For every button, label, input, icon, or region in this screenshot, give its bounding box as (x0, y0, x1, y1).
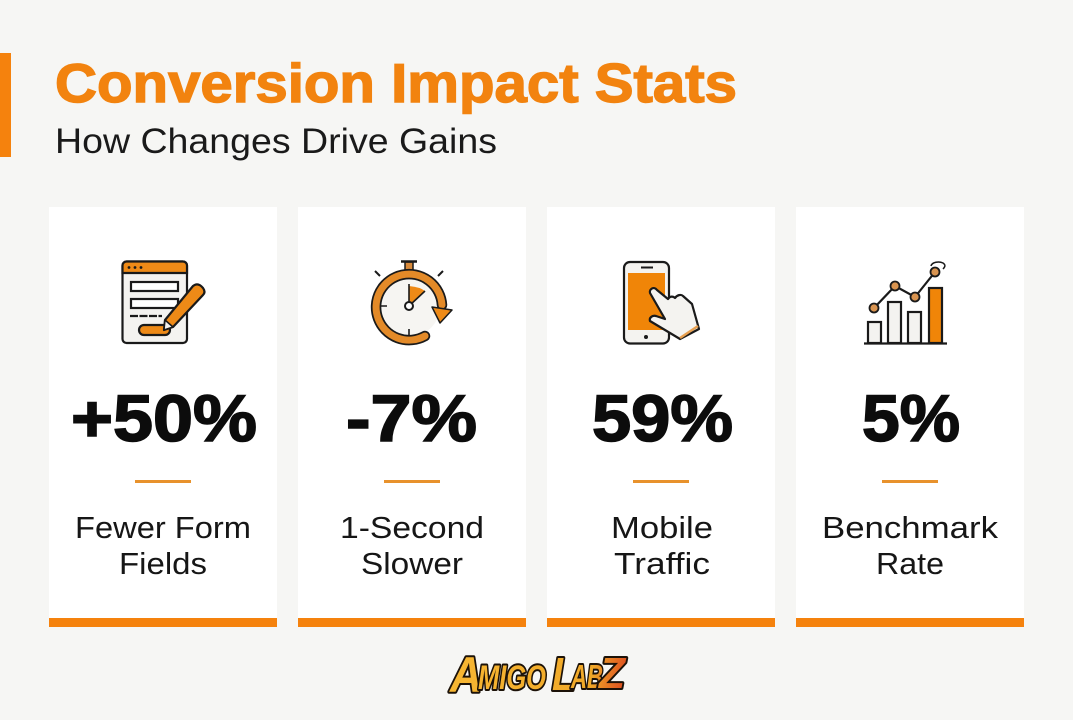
stat: 59%: 59% (592, 381, 733, 455)
label: benchmark rate: Benchmark (822, 510, 999, 545)
label: 1-second slower: Slower (361, 546, 463, 581)
icon: phone with tapping hand (624, 262, 699, 344)
logo: Amigo LabZ: MIGO (478, 659, 546, 697)
label: 1-second slower: 1-Second (340, 510, 484, 545)
logo: Amigo LabZ (448, 647, 627, 703)
label: fewer form fields: Fewer Form (75, 510, 251, 545)
title: Conversion Impact Stats (55, 52, 737, 114)
logo: Amigo LabZ: Z (597, 649, 627, 698)
stat: 5%: 5% (862, 381, 960, 455)
subtitle: How Changes Drive Gains (55, 122, 497, 161)
logo: Amigo LabZ: AB (570, 658, 603, 695)
label: benchmark rate: Rate (876, 546, 944, 581)
logo: Amigo LabZ: L (552, 648, 576, 700)
stat: -7%: -7% (346, 381, 477, 455)
icon: form and pencil (122, 262, 204, 343)
accent bar (0, 53, 11, 157)
panel: benchmark rate (796, 207, 1024, 627)
icon: stopwatch (375, 262, 452, 340)
stat: +50%: +50% (71, 381, 257, 455)
panel: fewer form fields (49, 207, 277, 627)
label: mobile traffic: Traffic (614, 546, 710, 581)
icon: bar and line chart (864, 262, 947, 344)
panel: mobile traffic (547, 207, 775, 627)
panel: 1-second slower (298, 207, 526, 627)
label: mobile traffic: Mobile (611, 510, 713, 545)
logo: Amigo LabZ: A (448, 647, 482, 703)
label: fewer form fields: Fields (119, 546, 207, 581)
